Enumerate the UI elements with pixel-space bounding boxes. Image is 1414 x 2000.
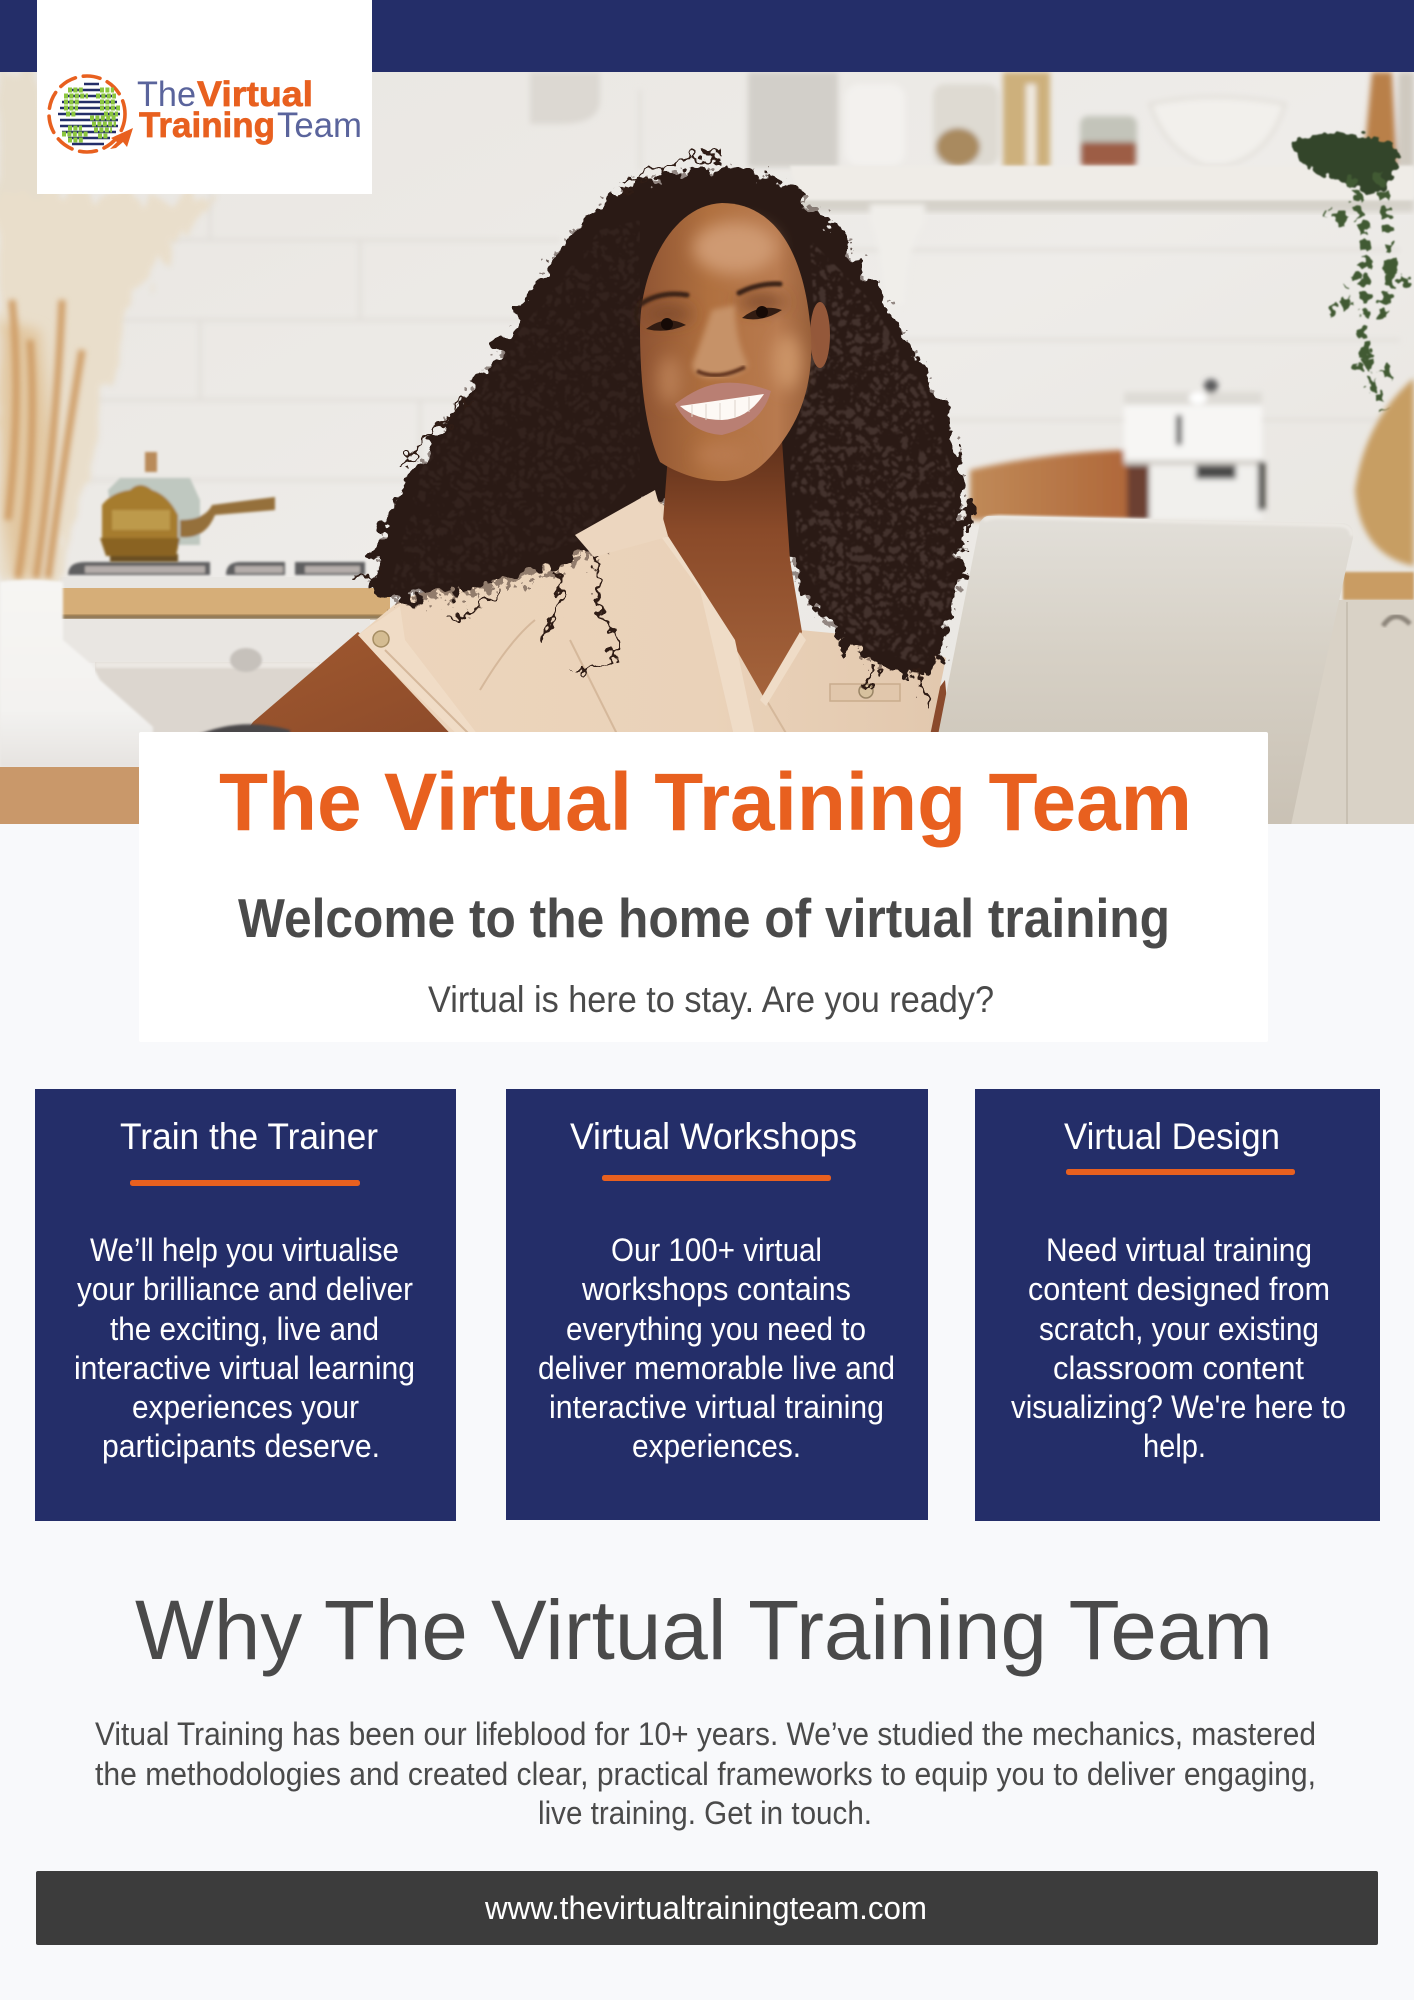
panel: Virtual Design [975,1089,1380,1521]
panel: Train the Trainer [35,1089,456,1521]
card body text: your brilliance and deliver [77,1271,413,1307]
smile [675,383,771,435]
card body text [74,1232,415,1464]
subtitle: Welcome to the home of virtual training [238,887,1170,949]
card body text: participants deserve. [102,1428,380,1464]
hero photo: woman at a laptop in a kitchen [0,72,1414,830]
ear [810,302,830,368]
orange rule [602,1175,831,1181]
hanging plant [1290,134,1410,410]
logo wordmark: The [137,75,196,114]
logo box [37,0,372,194]
orange rule [130,1180,360,1186]
card body text: Need virtual training [1046,1232,1312,1268]
woven wall decoration [1355,378,1414,566]
text block: why paragraph [95,1716,1316,1831]
main title: The Virtual Training Team [219,757,1192,848]
wooden board and coffee machine [970,379,1265,520]
orange rule [1066,1169,1295,1175]
arm at right side [930,680,946,732]
text block: why paragraph: live training. Get in touch. [538,1795,872,1831]
dried pampas grass [0,72,205,580]
top navy header bar [0,0,1414,72]
laptop lid [938,516,1353,830]
card body text: experiences your [132,1389,359,1425]
nose [692,305,748,378]
neck and chest [662,440,802,698]
card body text: content designed from [1028,1271,1330,1307]
white title panel [139,732,1268,1042]
footer website bar [36,1871,1378,1945]
logo wordmark: Team [277,106,362,145]
card heading: Virtual Design [1064,1116,1280,1157]
card body text: Our 100+ virtual [611,1232,822,1268]
logo wordmark: Virtual [197,75,313,114]
icon: globe with dashed ring and arrow [49,76,133,152]
card body text: classroom content [1053,1350,1304,1386]
card body text: We’ll help you virtualise [90,1232,399,1268]
eyebrows [641,284,780,304]
text block: why paragraph: the methodologies and created clear, practical frameworks to equip you to deliver engaging, [95,1756,1316,1792]
tagline: Virtual is here to stay. Are you ready? [428,979,994,1020]
kitchen wall [0,72,1414,824]
card body text: everything you need to [566,1311,866,1347]
heading: Why The Virtual Training Team: Why The Virtual Training Team [135,1583,1273,1677]
card body text: interactive virtual learning [74,1350,415,1386]
text block: why paragraph: Vitual Training has been our lifeblood for 10+ years. We’ve studied the mechanics, mastered [95,1716,1316,1752]
card heading: Virtual Workshops [570,1116,857,1157]
website url: www.thevirtualtrainingteam.com [484,1890,927,1926]
panel: Virtual Workshops [506,1089,928,1520]
card body text: workshops contains [581,1271,851,1307]
stove with brass pot [68,452,365,575]
card body text: the exciting, live and [110,1311,379,1347]
card body text [538,1232,895,1464]
right counter and cabinet [1280,572,1414,824]
shirt collar [575,490,806,740]
logo wordmark [137,75,362,145]
white vase [0,580,153,824]
card body text: experiences. [632,1428,801,1464]
face [640,203,811,481]
card body text: help. [1143,1428,1206,1464]
card body text: visualizing? We're here to [1011,1389,1346,1425]
card body text: deliver memorable live and [538,1350,895,1386]
left counter and sink [61,588,390,732]
logo wordmark: Training [139,106,275,145]
card heading: Train the Trainer [120,1116,378,1157]
card body text [1011,1232,1346,1464]
card body text: scratch, your existing [1039,1311,1319,1347]
blouse [358,501,946,732]
woman's arm [200,632,449,732]
face highlights [644,222,801,467]
eyes [646,306,782,331]
curly hair [350,155,966,710]
shelf with jars, bowl and bottle [530,72,1414,250]
card body text: interactive virtual training [549,1389,884,1425]
